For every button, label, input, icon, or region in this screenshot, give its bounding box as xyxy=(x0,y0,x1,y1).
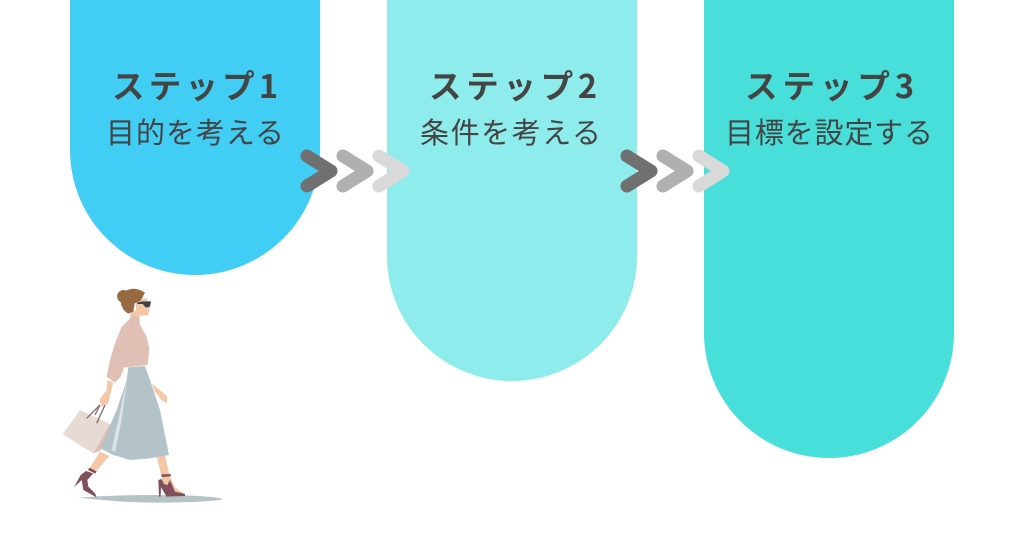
heading: step 1: ステップ1 xyxy=(112,61,278,108)
panel: step 1 xyxy=(70,0,320,275)
hair xyxy=(117,289,145,314)
panel: step 2 xyxy=(387,0,637,381)
heading: step 3: ステップ3 xyxy=(745,61,914,108)
panel: step 3 xyxy=(704,0,954,458)
bag xyxy=(63,410,110,453)
near hand xyxy=(99,380,113,407)
arrows: step 1 to step 2 xyxy=(307,156,403,186)
far arm xyxy=(152,383,167,403)
illustration: walking woman xyxy=(63,289,223,503)
arrows: step 2 to step 3 xyxy=(627,156,723,186)
heading: step 2: ステップ2 xyxy=(429,61,597,108)
rear shoe xyxy=(74,468,97,497)
front leg xyxy=(157,455,185,496)
rear leg xyxy=(89,452,109,471)
blouse xyxy=(107,315,149,383)
text: step 3 description: 目標を設定する xyxy=(725,110,933,152)
sunglasses xyxy=(137,301,151,308)
face xyxy=(136,298,150,316)
text: step 1 description: 目的を考える xyxy=(106,110,284,152)
neck xyxy=(130,310,139,322)
shadow xyxy=(78,495,223,503)
front shoe xyxy=(158,474,185,497)
skirt xyxy=(100,366,169,460)
text: step 2 description: 条件を考える xyxy=(420,110,601,152)
